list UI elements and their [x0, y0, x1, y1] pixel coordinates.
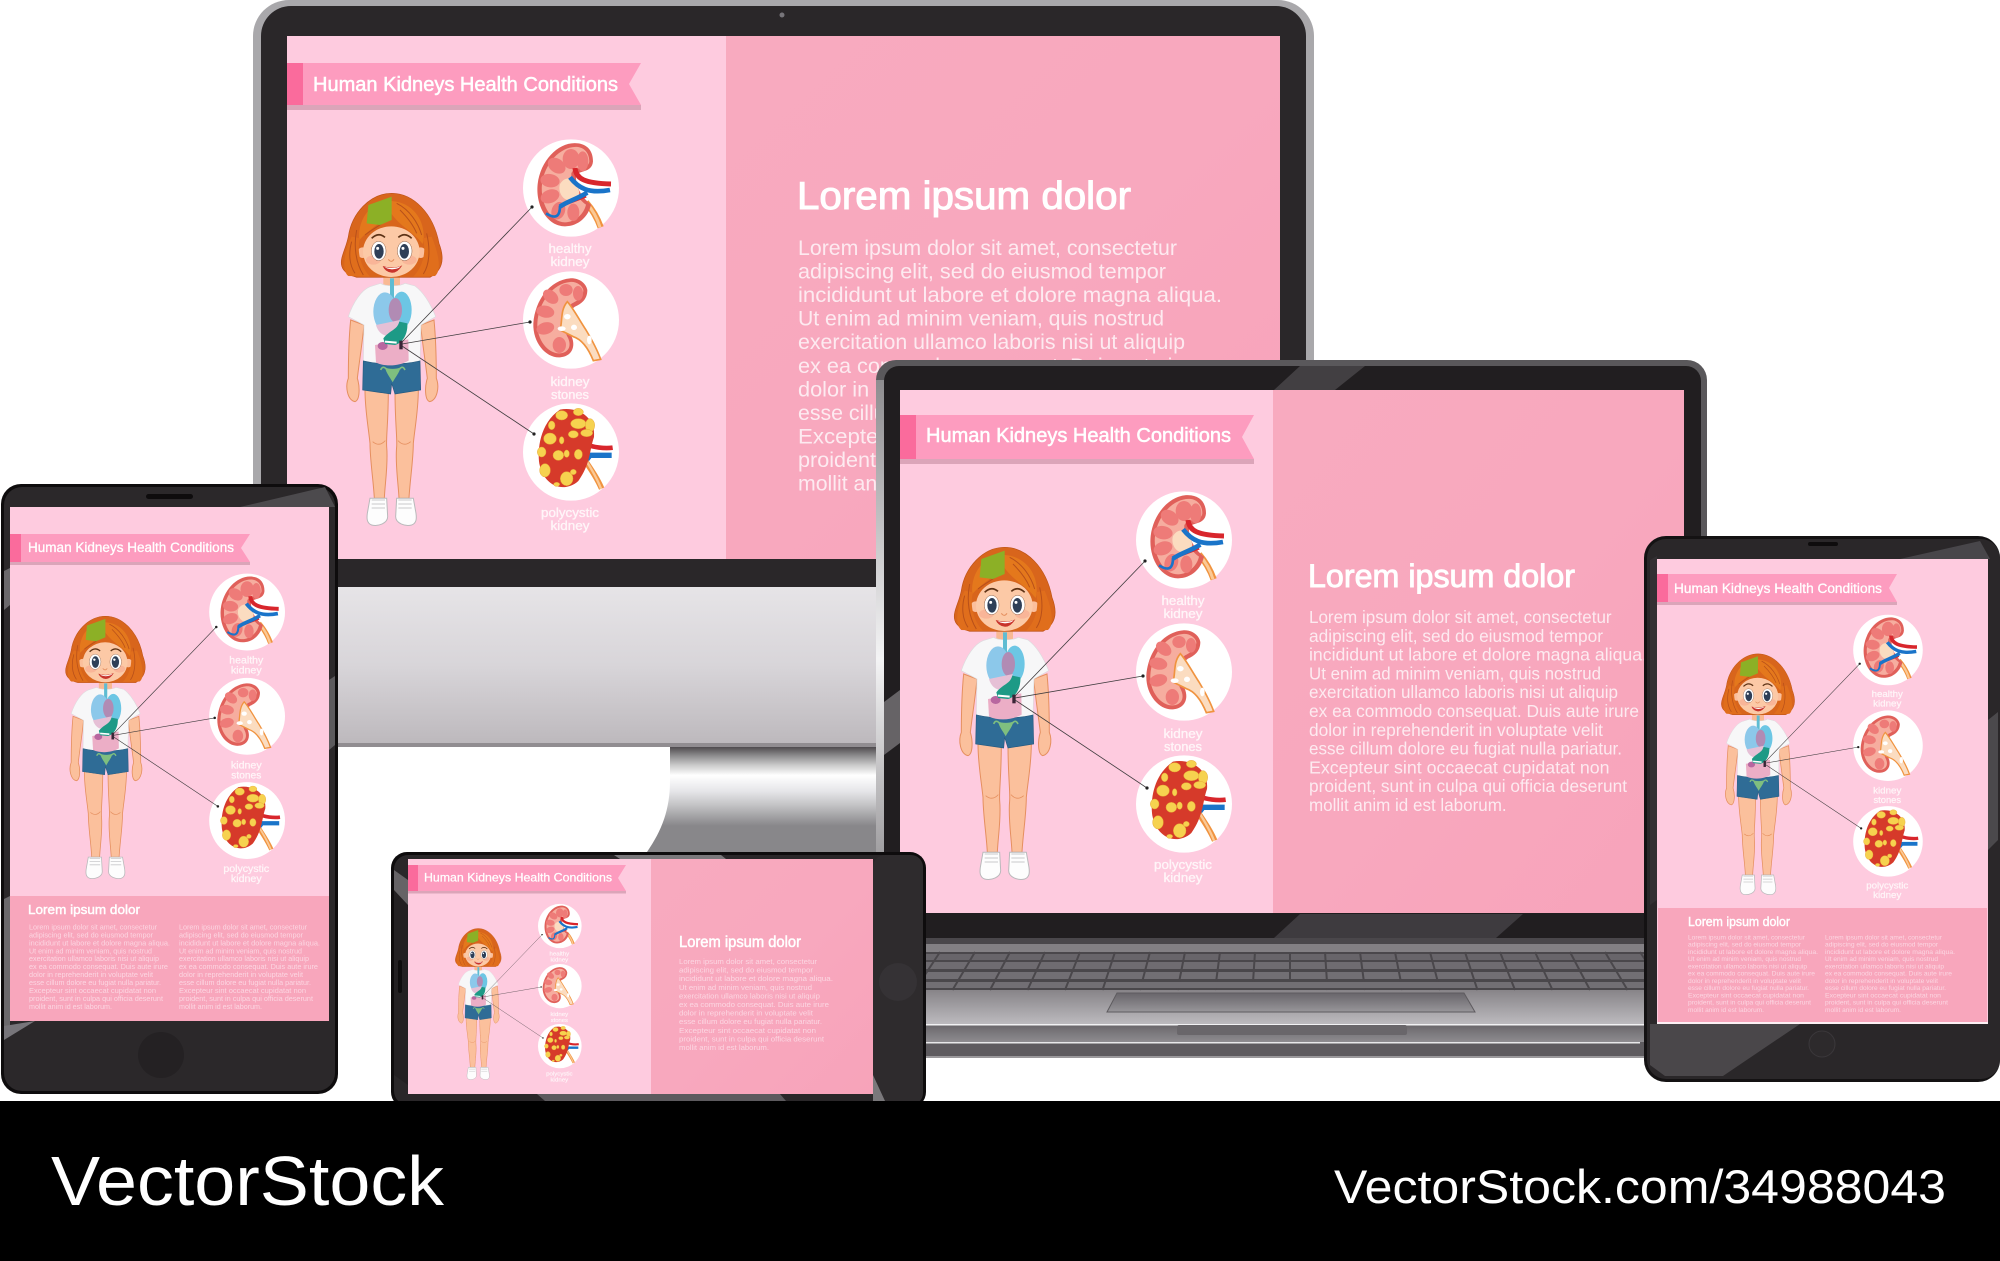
label: polycystic kidney: polycystic: [546, 1072, 573, 1078]
label: kidney stones: kidney: [1873, 785, 1902, 796]
icon: kidney stones: [523, 271, 619, 369]
panel: desktop monitor: [253, 0, 1314, 852]
text block: monitor: Excepteur sint occaecat cupidatat non: [798, 424, 1174, 448]
text column 1: left tablet: Ut enim ad minim veniam, quis nostrud: [29, 946, 152, 955]
label: polycystic kidney: kidney: [1873, 889, 1902, 900]
text block: laptop: esse cillum dolore eu fugiat nulla pariatur.: [1309, 739, 1622, 759]
icon: kidney stones: [1853, 710, 1923, 781]
label: kidney stones: kidney: [550, 374, 590, 389]
icon: kidney stones: [1136, 623, 1232, 721]
label: healthy kidney: kidney: [550, 254, 590, 269]
text block: phone: mollit anim id est laborum.: [679, 1043, 769, 1052]
text column 1: right tablet: Lorem ipsum dolor sit amet, consectetur: [1688, 934, 1806, 941]
icon: healthy kidney: [523, 139, 619, 237]
monitor screen right panel: [726, 36, 1280, 559]
text column 1: right tablet: proident, sunt in culpa qui officia deserunt: [1688, 1000, 1811, 1006]
text column 1: right tablet: mollit anim id est laborum.: [1688, 1007, 1764, 1014]
text column 1: right tablet: dolor in reprehenderit in voluptate velit: [1688, 978, 1801, 985]
label: polycystic kidney: [223, 864, 269, 885]
text column 2: left tablet: exercitation ullamco laboris nisi ut aliquip: [179, 954, 309, 963]
label: polycystic kidney: [546, 1072, 573, 1084]
banner: laptop: Human Kidneys Health Conditions: [926, 425, 1231, 447]
text block: laptop: [1309, 607, 1647, 815]
left tablet body: [1, 484, 338, 1094]
laptop screen content: [900, 415, 1254, 885]
text block: laptop: Lorem ipsum dolor sit amet, consectetur: [1309, 607, 1612, 627]
text column 1: right tablet: esse cillum dolore eu fugiat nulla pariatur.: [1688, 985, 1809, 992]
phone screen left panel: [408, 859, 651, 1094]
text column 2: left tablet: mollit anim id est laborum.: [179, 1002, 262, 1011]
icon: polycystic kidney: [209, 782, 285, 859]
laptop screen left panel: [900, 390, 1273, 913]
banner: monitor title: Human Kidneys Health Conditions: [313, 74, 618, 96]
icon: kidney stones: [538, 964, 582, 1008]
label: polycystic kidney: kidney: [1164, 870, 1203, 885]
text column 2: left tablet: Ut enim ad minim veniam, quis nostrud: [179, 946, 302, 955]
label: polycystic kidney: [1154, 857, 1213, 885]
text block: monitor: incididunt ut labore et dolore magna aliqua.: [798, 283, 1222, 307]
text block: phone: exercitation ullamco laboris nisi ut aliquip: [679, 991, 820, 1000]
monitor frame: [253, 0, 1314, 600]
text column 2: right tablet: dolor in reprehenderit in voluptate velit: [1825, 978, 1938, 985]
right tablet body: [1644, 536, 2000, 1082]
icon: healthy kidney: [209, 574, 285, 650]
text column 1: left tablet: dolor in reprehenderit in voluptate velit: [29, 970, 153, 979]
label: kidney stones: stones: [1164, 739, 1202, 754]
icon: polycystic kidney: [1136, 755, 1232, 853]
banner: laptop: [900, 415, 1254, 464]
label: polycystic kidney: polycystic: [223, 864, 269, 875]
text column 1: left tablet: esse cillum dolore eu fugiat nulla pariatur.: [29, 978, 161, 987]
text block: phone: Excepteur sint occaecat cupidatat non: [679, 1026, 816, 1035]
text column 2: right tablet: adipiscing elit, sed do eiusmod tempor: [1825, 942, 1939, 949]
text block: monitor: ex ea commodo consequat. Duis aute irure: [798, 354, 1211, 378]
monitor chin: [253, 587, 1314, 743]
text column 2: left tablet: ex ea commodo consequat. Duis aute irure: [179, 962, 318, 971]
footer url: VectorStock.com/34988043: [1334, 1160, 1946, 1213]
pointer lines: [114, 626, 219, 808]
illustration group: phone: [455, 904, 582, 1084]
text block: monitor: [798, 236, 1222, 496]
text column 2: left tablet: incididunt ut labore et dolore magna aliqua.: [179, 938, 320, 947]
text block: laptop: ex ea commodo consequat. Duis aute irure: [1309, 701, 1639, 721]
label: healthy kidney: healthy: [1162, 593, 1205, 608]
text block: monitor: esse cillum dolore eu fugiat nulla pariatur.: [798, 401, 1190, 425]
pointer lines: [483, 934, 544, 1039]
text block: phone: Lorem ipsum dolor sit amet, consectetur: [679, 957, 817, 966]
text block: monitor: Ut enim ad minim veniam, quis nostrud: [798, 307, 1164, 331]
label: kidney stones: kidney: [231, 760, 263, 771]
banner: left tablet: Human Kidneys Health Conditions: [28, 540, 234, 555]
text column 2: right tablet: esse cillum dolore eu fugiat nulla pariatur.: [1825, 985, 1946, 992]
label: healthy kidney: [1872, 688, 1903, 709]
label: healthy kidney: [229, 655, 264, 677]
girl: [66, 616, 145, 879]
label: polycystic kidney: polycystic: [541, 505, 600, 520]
text column 1: left tablet: exercitation ullamco laboris nisi ut aliquip: [29, 954, 159, 963]
pointer lines: [402, 205, 536, 436]
text column 1: right tablet: Ut enim ad minim veniam, quis nostrud: [1688, 956, 1801, 963]
text column 2: left tablet: Excepteur sint occaecat cupidatat non: [179, 986, 306, 995]
text block: laptop: proident, sunt in culpa qui officia deserunt: [1309, 776, 1627, 796]
text column 2: left tablet: adipiscing elit, sed do eiusmod tempor: [179, 930, 304, 939]
text column 1: right tablet: [1688, 934, 1818, 1014]
text column 2: left tablet: proident, sunt in culpa qui officia deserunt: [179, 994, 313, 1003]
text block: laptop: dolor in reprehenderit in voluptate velit: [1309, 720, 1603, 740]
label: kidney stones: kidney: [1164, 726, 1203, 741]
footer bar: [0, 1101, 2000, 1261]
label: kidney stones: stones: [231, 771, 261, 782]
text column 2: right tablet: incididunt ut labore et dolore magna aliqua.: [1825, 949, 1955, 956]
text block: phone: dolor in reprehenderit in voluptate velit: [679, 1009, 814, 1018]
laptop trackpad: [1107, 993, 1475, 1012]
label: kidney stones: stones: [1873, 794, 1901, 805]
icon: healthy kidney: [538, 904, 582, 948]
label: healthy kidney: [1162, 593, 1205, 621]
text block: laptop: mollit anim id est laborum.: [1309, 795, 1507, 815]
phone body: [391, 852, 926, 1108]
label: kidney stones: stones: [551, 387, 589, 402]
left tablet speaker: [146, 494, 193, 499]
text block: laptop: Ut enim ad minim veniam, quis nostrud: [1309, 663, 1601, 683]
text column 2: left tablet: [179, 922, 320, 1011]
right tablet home button: [1809, 1031, 1835, 1057]
illustration group: right tablet: [1721, 615, 1923, 900]
left tablet text panel: [10, 896, 329, 1021]
text block: monitor: adipiscing elit, sed do eiusmod tempor: [798, 260, 1166, 284]
text column 1: left tablet: proident, sunt in culpa qui officia deserunt: [29, 994, 163, 1003]
banner: phone: Human Kidneys Health Conditions: [424, 870, 612, 884]
icon: healthy kidney: [1853, 615, 1923, 685]
text column 1: right tablet: exercitation ullamco laboris nisi ut aliquip: [1688, 963, 1807, 970]
illustration group: left tablet: [66, 574, 285, 885]
left tablet screen: [10, 507, 329, 1021]
label: healthy kidney: healthy: [548, 241, 592, 256]
text column 2: right tablet: proident, sunt in culpa qui officia deserunt: [1825, 1000, 1948, 1006]
label: healthy kidney: kidney: [1164, 606, 1203, 621]
label: healthy kidney: healthy: [1872, 688, 1903, 699]
label: polycystic kidney: polycystic: [1154, 857, 1213, 872]
pointer lines: [1015, 559, 1149, 790]
icon: polycystic kidney: [523, 403, 619, 501]
panel: left tablet: [1, 484, 338, 1094]
label: polycystic kidney: [541, 505, 600, 533]
banner: monitor title: [287, 63, 641, 110]
text block: laptop: adipiscing elit, sed do eiusmod tempor: [1309, 626, 1603, 646]
icon: healthy kidney: [1136, 491, 1232, 589]
label: kidney stones: kidney: [550, 1012, 568, 1018]
panel: right tablet: [1644, 536, 2000, 1082]
icon: polycystic kidney: [538, 1024, 582, 1068]
text column 1: left tablet: [29, 922, 170, 1011]
text column 2: right tablet: Ut enim ad minim veniam, quis nostrud: [1825, 956, 1938, 963]
right tablet speaker: [1808, 542, 1838, 546]
phone home button: [879, 963, 917, 1001]
phone speaker: [398, 960, 402, 993]
girl: [455, 928, 501, 1080]
text column 1: right tablet: adipiscing elit, sed do eiusmod tempor: [1688, 942, 1802, 949]
text column 1: left tablet: adipiscing elit, sed do eiusmod tempor: [29, 930, 154, 939]
text column 2: right tablet: Lorem ipsum dolor sit amet, consectetur: [1825, 934, 1943, 941]
left tablet home button: [138, 1032, 184, 1078]
label: healthy kidney: [548, 241, 592, 269]
pointer lines: [1765, 663, 1862, 830]
footer brand: VectorStock: [51, 1142, 445, 1220]
label: polycystic kidney: [1866, 880, 1909, 900]
text block: monitor: exercitation ullamco laboris nisi ut aliquip: [798, 330, 1185, 354]
laptop keyboard: [905, 952, 1690, 990]
laptop screen right panel: [1273, 390, 1684, 913]
panel: phone: [391, 852, 926, 1108]
text column 2: left tablet: Lorem ipsum dolor sit amet, consectetur: [179, 922, 308, 932]
text column 2: right tablet: mollit anim id est laborum.: [1825, 1007, 1901, 1014]
text column 2: left tablet: esse cillum dolore eu fugiat nulla pariatur.: [179, 978, 311, 987]
monitor stand: [647, 747, 1000, 852]
heading: right tablet: Lorem ipsum dolor: [1688, 915, 1790, 929]
text block: phone: incididunt ut labore et dolore magna aliqua.: [679, 974, 833, 983]
label: polycystic kidney: polycystic: [1866, 880, 1909, 891]
banner: phone: [408, 865, 626, 894]
text column 1: left tablet: incididunt ut labore et dolore magna aliqua.: [29, 938, 170, 947]
text block: phone: [679, 957, 833, 1052]
icon: polycystic kidney: [1853, 806, 1923, 877]
text column 2: right tablet: [1825, 934, 1955, 1014]
text column 1: left tablet: ex ea commodo consequat. Duis aute irure: [29, 962, 168, 971]
label: healthy kidney: kidney: [550, 958, 568, 964]
heading: monitor: Lorem ipsum dolor: [797, 175, 1131, 218]
label: kidney stones: [550, 374, 590, 402]
label: kidney stones: [231, 760, 263, 782]
heading: phone: Lorem ipsum dolor: [679, 934, 801, 951]
text block: laptop: Excepteur sint occaecat cupidatat non: [1309, 757, 1610, 777]
banner: left tablet: [10, 534, 250, 565]
text block: phone: Ut enim ad minim veniam, quis nostrud: [679, 983, 812, 992]
label: healthy kidney: kidney: [1873, 698, 1902, 709]
girl: [954, 547, 1055, 879]
text block: phone: proident, sunt in culpa qui officia deserunt: [679, 1034, 825, 1043]
text block: monitor: proident, sunt in culpa qui officia deserunt: [798, 448, 1196, 472]
label: healthy kidney: [550, 952, 569, 964]
text block: phone: adipiscing elit, sed do eiusmod tempor: [679, 966, 813, 975]
text column 1: left tablet: Lorem ipsum dolor sit amet, consectetur: [29, 922, 158, 932]
label: polycystic kidney: kidney: [550, 518, 590, 533]
heading: laptop: Lorem ipsum dolor: [1308, 558, 1575, 594]
monitor screen left panel: [287, 36, 726, 559]
text column 1: right tablet: ex ea commodo consequat. Duis aute irure: [1688, 971, 1815, 978]
laptop base: [878, 925, 1707, 1058]
label: healthy kidney: kidney: [231, 666, 263, 677]
text block: laptop: exercitation ullamco laboris nisi ut aliquip: [1309, 682, 1618, 702]
label: polycystic kidney: kidney: [550, 1078, 568, 1084]
text column 2: right tablet: ex ea commodo consequat. Duis aute irure: [1825, 971, 1952, 978]
banner: right tablet: Human Kidneys Health Conditions: [1674, 581, 1882, 596]
right tablet screen: [1657, 559, 1988, 1024]
girl: [1721, 654, 1795, 895]
text column 1: left tablet: Excepteur sint occaecat cupidatat non: [29, 986, 156, 995]
label: healthy kidney: healthy: [550, 952, 569, 958]
banner: right tablet: [1657, 574, 1897, 605]
text block: phone: ex ea commodo consequat. Duis aute irure: [679, 1000, 829, 1009]
label: kidney stones: [1164, 726, 1203, 754]
label: kidney stones: [550, 1012, 568, 1024]
laptop lid: [876, 360, 1707, 938]
text column 1: right tablet: incididunt ut labore et dolore magna aliqua.: [1688, 949, 1818, 956]
text block: monitor: dolor in reprehenderit in voluptate velit: [798, 377, 1166, 401]
text block: laptop: incididunt ut labore et dolore magna aliqua.: [1309, 645, 1647, 665]
text block: phone: esse cillum dolore eu fugiat nulla pariatur.: [679, 1017, 822, 1026]
icon: kidney stones: [209, 678, 285, 755]
label: kidney stones: [1873, 785, 1902, 805]
text column 1: left tablet: mollit anim id est laborum.: [29, 1002, 112, 1011]
text block: monitor: mollit anim id est laborum.: [798, 472, 1045, 496]
label: kidney stones: stones: [551, 1018, 568, 1024]
text column 2: left tablet: dolor in reprehenderit in voluptate velit: [179, 970, 303, 979]
text column 2: right tablet: exercitation ullamco laboris nisi ut aliquip: [1825, 963, 1944, 970]
right tablet text panel: [1658, 908, 1987, 1023]
label: healthy kidney: healthy: [229, 655, 264, 666]
panel: laptop: [876, 360, 1707, 1058]
heading: left tablet: Lorem ipsum dolor: [28, 902, 141, 917]
phone screen right panel: [651, 859, 873, 1094]
text column 2: right tablet: Excepteur sint occaecat cupidatat non: [1825, 992, 1941, 999]
illustration: girl with organs: [341, 193, 442, 525]
text block: monitor: Lorem ipsum dolor sit amet, consectetur: [798, 236, 1177, 260]
text column 1: right tablet: Excepteur sint occaecat cupidatat non: [1688, 992, 1804, 999]
label: polycystic kidney: kidney: [231, 874, 263, 885]
